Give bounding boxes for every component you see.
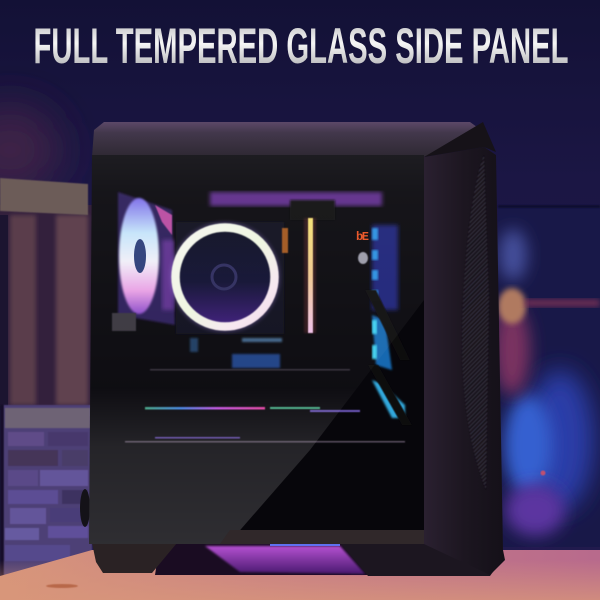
white connector <box>358 252 368 264</box>
left foot <box>92 543 177 573</box>
purple top glow <box>210 192 382 220</box>
CPU cooler ring fan <box>172 222 284 334</box>
poster on right <box>494 205 600 547</box>
front mesh strip <box>462 155 489 490</box>
orange heatsink block <box>282 228 288 253</box>
right side RGB strip <box>365 225 412 425</box>
internal components <box>112 192 412 442</box>
RAM stick lit <box>304 218 316 333</box>
rear fan <box>112 192 175 331</box>
debug LED: bE <box>356 230 369 244</box>
front panel <box>424 147 505 575</box>
rear wheel <box>80 489 90 527</box>
floor glow under case <box>155 543 375 575</box>
graphics card RGB <box>125 369 405 442</box>
glass side panel <box>89 155 424 544</box>
shelf and wooden post on left <box>0 178 95 410</box>
right foot <box>340 543 500 576</box>
top panel <box>92 122 488 157</box>
brick wall on left <box>0 405 92 580</box>
PC case <box>80 122 505 576</box>
desk <box>0 550 600 600</box>
motherboard details <box>190 338 282 368</box>
glass reflection sheen <box>89 155 424 544</box>
glass bottom band <box>220 530 424 544</box>
